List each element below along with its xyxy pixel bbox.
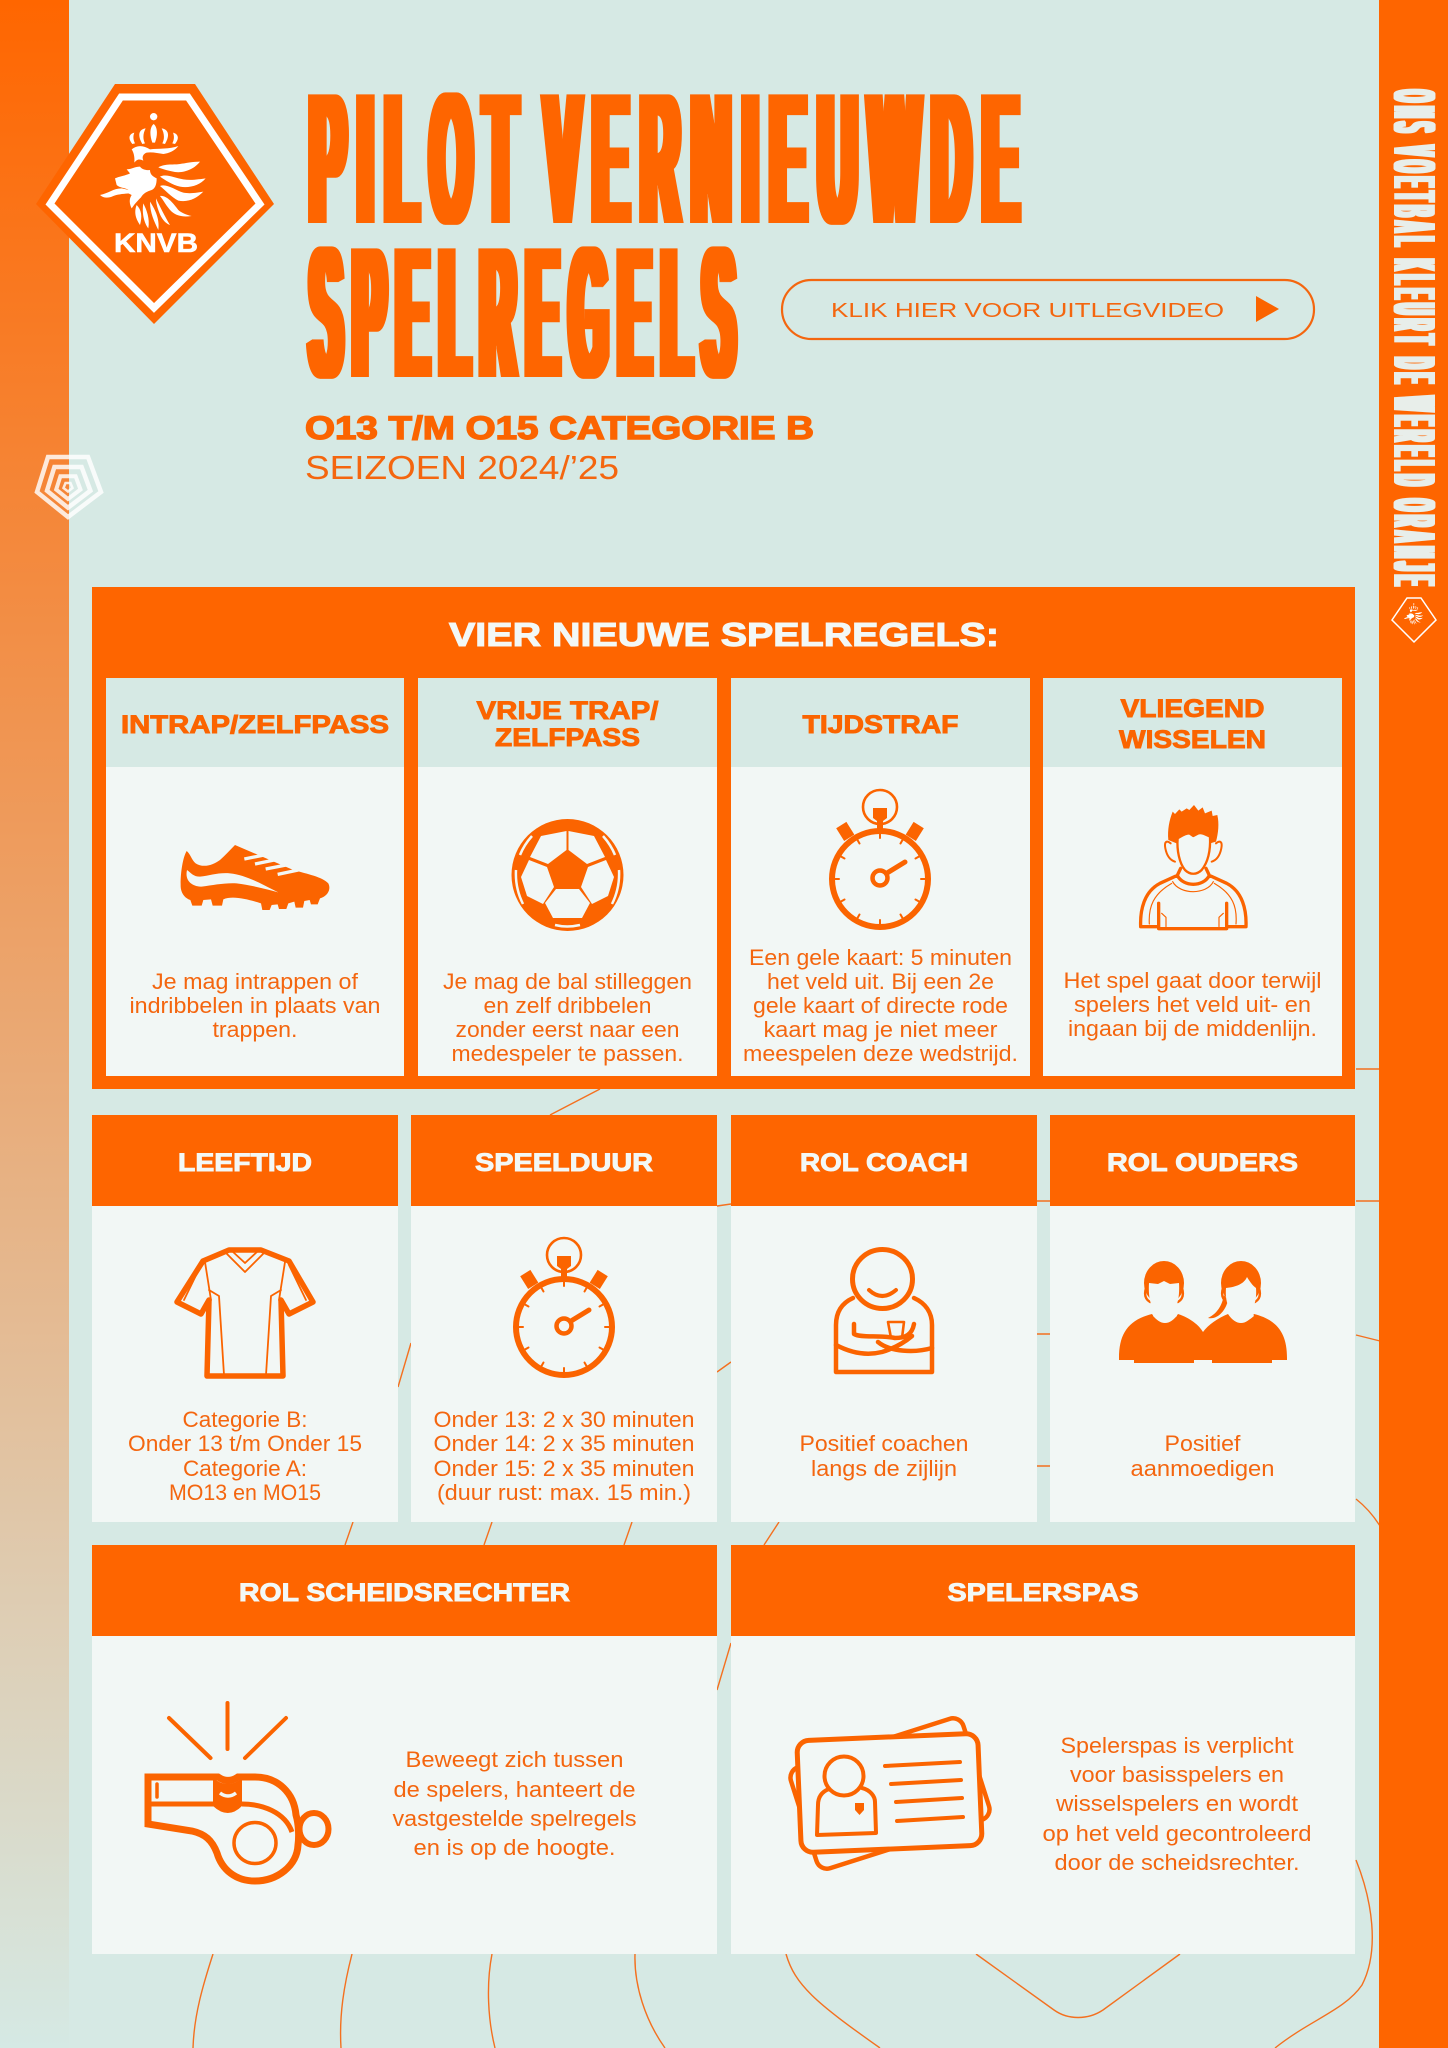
video button: KLIK HIER VOOR UITLEGVIDEO	[831, 300, 1224, 322]
right orange sidebar	[1379, 0, 1448, 2048]
panel: spelerspas	[731, 1545, 1355, 1954]
description: voor basisspelers en	[1070, 1762, 1284, 1787]
card: intrap/zelfpass: INTRAP/ZELFPASS	[121, 711, 389, 739]
small sidebar logo	[1392, 598, 1436, 642]
subtitle	[305, 410, 814, 486]
description: de spelers, hanteert de	[394, 1777, 636, 1802]
description: wisselspelers en wordt	[1055, 1791, 1298, 1816]
icon: player	[1141, 805, 1246, 929]
title	[310, 54, 1031, 417]
card: vliegend wisselen: VLIEGEND	[1120, 695, 1264, 723]
description: Categorie B:	[182, 1407, 308, 1432]
description: Spelerspas is verplicht	[1060, 1733, 1294, 1758]
card: vrije trap/zelfpass: ZELFPASS	[495, 724, 640, 752]
description	[128, 1407, 362, 1505]
card: tijdstraf: TIJDSTRAF	[802, 711, 958, 739]
left gradient sidebar	[0, 0, 69, 2048]
card: vliegend wisselen: WISSELEN	[1119, 726, 1266, 754]
description: (duur rust: max. 15 min.)	[437, 1480, 691, 1505]
logo wordmark: KNVB	[114, 228, 198, 258]
description	[1064, 968, 1322, 1041]
description: Je mag intrappen of	[152, 969, 359, 994]
description: Een gele kaart: 5 minuten	[749, 945, 1012, 970]
description: het veld uit. Bij een 2e	[767, 969, 994, 994]
description	[392, 1747, 636, 1860]
icon: stopwatch	[832, 790, 928, 927]
icon: football	[512, 819, 624, 931]
description: kaart mag je niet meer	[764, 1017, 998, 1042]
description	[1130, 1431, 1274, 1481]
panel: speelduur: SPEELDUUR	[475, 1149, 653, 1177]
description	[743, 945, 1018, 1066]
description: medespeler te passen.	[452, 1041, 684, 1066]
description: Het spel gaat door terwijl	[1064, 968, 1322, 993]
description: Je mag de bal stilleggen	[443, 969, 692, 994]
description: Positief coachen	[800, 1431, 968, 1456]
description: op het veld gecontroleerd	[1042, 1821, 1312, 1846]
description: MO13 en MO15	[169, 1480, 321, 1505]
description: Onder 14: 2 x 35 minuten	[434, 1431, 694, 1456]
small pentagon emblem	[37, 457, 101, 517]
panel: leeftijd: LEEFTIJD	[178, 1149, 312, 1177]
card: tijdstraf	[731, 678, 1030, 1076]
icon: play arrow	[1256, 296, 1279, 322]
description: langs de zijlijn	[811, 1456, 957, 1481]
panel heading: VIER NIEUWE SPELREGELS:	[449, 616, 999, 653]
icon: player cards	[788, 1715, 992, 1872]
card: vrije trap/zelfpass: VRIJE TRAP/	[476, 697, 659, 725]
video button	[782, 280, 1314, 339]
KNVB logo	[36, 84, 274, 324]
text: ONS VOETBAL KLEURT DE WERELD ORANJE	[1381, 90, 1447, 590]
description: trappen.	[212, 1017, 298, 1042]
card: vliegend wisselen	[1043, 678, 1342, 1076]
description: meespelen deze wedstrijd.	[743, 1041, 1018, 1066]
panel: rol coach: ROL COACH	[800, 1149, 968, 1177]
icon: lion and crown	[100, 113, 206, 230]
description	[443, 969, 692, 1066]
description: spelers het veld uit- en	[1074, 992, 1311, 1017]
card: vrije trap/zelfpass	[418, 678, 717, 1076]
panel: spelerspas: SPELERSPAS	[948, 1579, 1138, 1607]
description: door de scheidsrechter.	[1054, 1850, 1300, 1875]
description	[130, 969, 380, 1042]
description: ingaan bij de middenlijn.	[1068, 1016, 1317, 1041]
panel: rol ouders	[1050, 1115, 1355, 1522]
description: indribbelen in plaats van	[130, 993, 380, 1018]
panel: vier nieuwe spelregels	[92, 587, 1355, 1089]
icon: whistle	[148, 1703, 328, 1881]
card: intrap/zelfpass	[106, 678, 404, 1076]
description: en is op de hoogte.	[414, 1835, 616, 1860]
description	[434, 1407, 694, 1505]
subtitle: O13 T/M O15 CATEGORIE B	[305, 410, 814, 446]
description: en zelf dribbelen	[484, 993, 652, 1018]
panel: rol coach	[731, 1115, 1037, 1522]
description: Onder 13 t/m Onder 15	[128, 1431, 362, 1456]
description	[1042, 1733, 1312, 1875]
panel: rol scheidsrechter	[92, 1545, 717, 1954]
description: gele kaart of directe rode	[753, 993, 1008, 1018]
description: Onder 15: 2 x 35 minuten	[434, 1456, 694, 1481]
icon: stopwatch	[516, 1238, 612, 1375]
subtitle: SEIZOEN 2024/’25	[305, 449, 619, 486]
description	[800, 1431, 968, 1481]
panel: leeftijd	[92, 1115, 398, 1522]
description: Beweegt zich tussen	[406, 1747, 624, 1772]
icon: football boot	[181, 845, 329, 910]
panel: speelduur	[411, 1115, 717, 1522]
description: aanmoedigen	[1130, 1456, 1274, 1481]
description: zonder eerst naar een	[456, 1017, 680, 1042]
icon: parents	[1119, 1261, 1287, 1363]
icon: shirt	[177, 1250, 313, 1376]
description: vastgestelde spelregels	[392, 1806, 636, 1831]
description: Onder 13: 2 x 30 minuten	[434, 1407, 694, 1432]
description: Positief	[1164, 1431, 1241, 1456]
icon: coach	[836, 1250, 932, 1372]
description: Categorie A:	[183, 1456, 307, 1481]
panel: rol ouders: ROL OUDERS	[1107, 1149, 1298, 1177]
panel: rol scheidsrechter: ROL SCHEIDSRECHTER	[239, 1579, 570, 1607]
